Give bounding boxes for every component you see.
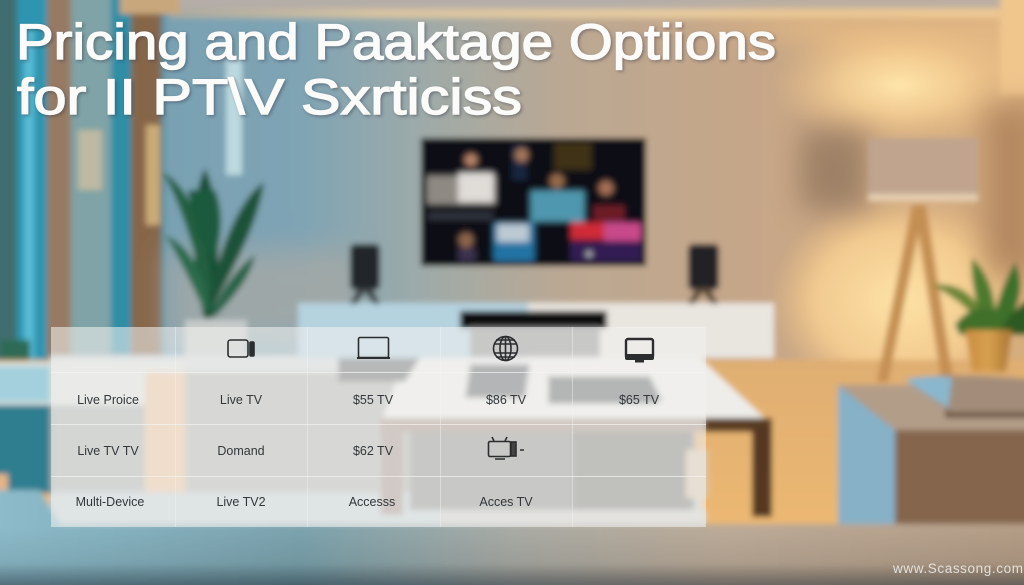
icon: laptop [357,338,390,358]
wall shading around plant [165,250,355,340]
icon: globe [494,336,518,361]
row: multi-device [76,495,533,509]
row: on demand [77,444,394,458]
lamp glow on wall [770,23,1024,405]
row: multi-device: Acces TV [479,495,533,509]
row: on demand: Live TV TV [77,444,139,458]
row: live price [77,393,660,407]
right wall column [800,0,1024,275]
panel: pricing table [51,327,706,527]
title line 1: Pricing and Paaktage Optiions [16,14,776,70]
floor lamp [868,138,978,382]
watermark: www.Scassong.com [892,561,1024,576]
row: live price: $86 TV [486,393,527,407]
window and curtains [0,0,242,380]
TV console [298,303,774,358]
icon: monitor [625,339,654,362]
wall [0,0,1024,400]
row: multi-device: Accesss [349,495,395,509]
table background [51,327,706,527]
row: live price: $55 TV [353,393,394,407]
speaker left [350,244,380,304]
row: on demand: $62 TV [353,444,394,458]
plant right [932,258,1024,372]
row: live price: $65 TV [619,393,660,407]
pot left [185,320,247,370]
rug and cushions under the table [50,356,708,528]
icon: set-top box [228,340,254,357]
floor [0,360,1024,530]
row: multi-device: Multi-Device [76,495,144,509]
television [421,138,646,266]
icon: smart tv [488,437,524,459]
left sofa [0,362,185,498]
row: on demand: Domand [217,444,265,458]
title line 2: for II PT\V Sxrticiss [17,69,522,125]
row: multi-device: Live TV2 [216,495,266,509]
row: live price: Live TV [220,393,263,407]
plant left [162,168,264,318]
foreground sofa [0,490,1024,585]
title [16,14,776,125]
ceiling light strip [0,0,1024,80]
speaker right [688,244,719,304]
armchair [838,375,1024,527]
row: live price: Live Proice [77,393,139,407]
coffee table [338,358,772,517]
